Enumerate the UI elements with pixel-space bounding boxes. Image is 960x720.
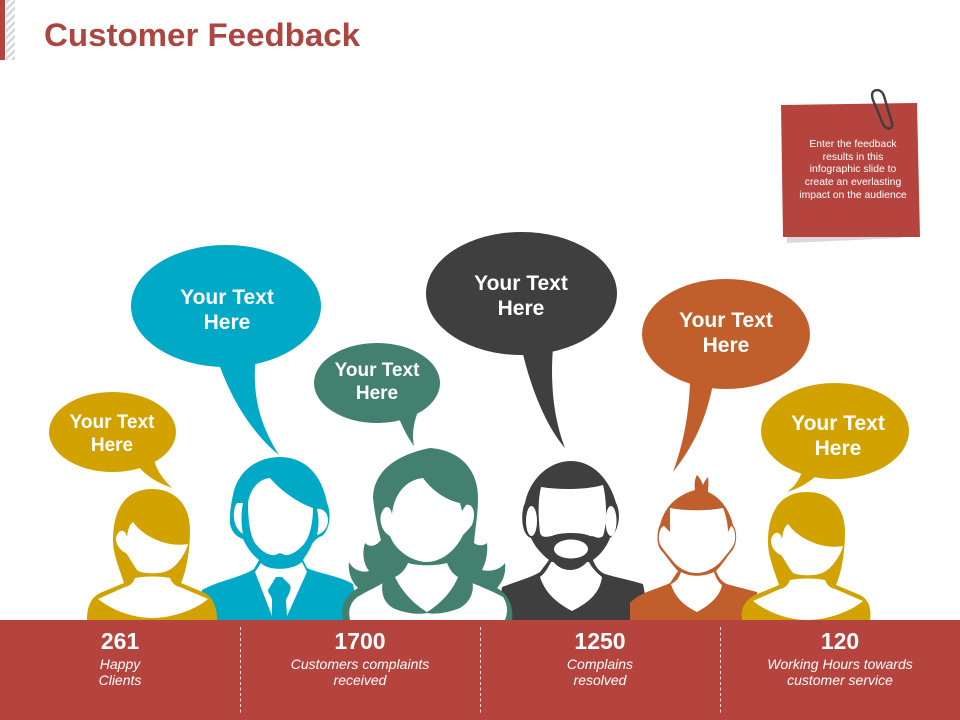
speech bubble: green: Your Text xyxy=(335,360,420,381)
speech bubble: yellow right: Your Text xyxy=(791,412,885,435)
note text: Enter the feedback xyxy=(809,139,897,150)
stat: happy clients: 261 xyxy=(101,628,139,654)
chest xyxy=(753,578,863,620)
note text: results in this xyxy=(823,152,883,163)
neck xyxy=(395,563,458,612)
collar xyxy=(382,565,473,614)
stat: working hours: 120 xyxy=(821,628,859,654)
note text: infographic slide to xyxy=(810,164,897,175)
stat: complaints received xyxy=(291,628,429,688)
speech bubble: green xyxy=(314,343,440,446)
face xyxy=(380,478,474,562)
speech bubble: dark: Here xyxy=(498,297,544,320)
stat: working hours: Working Hours towards xyxy=(767,656,913,672)
face xyxy=(771,524,843,575)
figure: blue man xyxy=(200,457,360,620)
neck xyxy=(540,562,602,611)
stat: working hours xyxy=(767,628,913,688)
note text xyxy=(799,139,907,201)
ears xyxy=(526,506,537,536)
stat: happy clients: Happy xyxy=(100,656,141,672)
stat: complaints resolved: 1250 xyxy=(574,628,626,654)
note text: create an everlasting xyxy=(805,177,901,188)
figure: orange man xyxy=(630,475,757,620)
speech bubble: yellow right xyxy=(761,383,909,492)
beard xyxy=(540,530,603,570)
figure: dark man xyxy=(498,461,650,620)
title: Customer Feedback xyxy=(44,17,360,53)
stat: complaints resolved: resolved xyxy=(574,672,628,688)
neck xyxy=(671,572,722,612)
stat: complaints received: 1700 xyxy=(334,628,386,654)
collar xyxy=(255,562,307,616)
mouth gap xyxy=(554,540,588,558)
speech bubble: yellow left: Your Text xyxy=(70,412,155,433)
face xyxy=(248,478,313,555)
stat: complaints received: received xyxy=(334,672,388,688)
speech bubble: dark xyxy=(426,232,617,448)
stat: happy clients: Clients xyxy=(99,672,141,688)
sticky note xyxy=(781,90,920,243)
face xyxy=(659,508,735,573)
speech bubble: blue: Here xyxy=(204,311,250,334)
speech bubble: yellow left: Here xyxy=(91,435,133,456)
face xyxy=(539,485,606,538)
face xyxy=(116,522,188,573)
speech bubble: blue: Your Text xyxy=(180,286,274,309)
speech bubble: orange: Your Text xyxy=(679,309,773,332)
stats band xyxy=(0,620,960,720)
title accent bar xyxy=(0,0,15,60)
speech bubble: orange xyxy=(642,279,810,472)
stat: happy clients xyxy=(99,628,141,688)
speech bubble: yellow right: Here xyxy=(815,437,861,460)
chest xyxy=(349,583,507,620)
speech bubble: green: Here xyxy=(356,383,398,404)
stat: complaints resolved xyxy=(567,628,633,688)
icon: paper clip xyxy=(872,90,892,129)
ears xyxy=(234,503,243,534)
speech bubble: blue xyxy=(131,245,321,455)
figure: yellow woman right xyxy=(742,492,871,620)
chest xyxy=(98,576,208,618)
stat: complaints received: Customers complaints xyxy=(291,656,429,672)
stat: working hours: customer service xyxy=(787,672,893,688)
speech bubble: yellow left xyxy=(49,392,176,488)
speech bubble: orange: Here xyxy=(703,334,749,357)
figure: green woman xyxy=(342,448,512,620)
note text: impact on the audience xyxy=(799,190,907,201)
speech bubble: dark: Your Text xyxy=(474,272,568,295)
stat: complaints resolved: Complains xyxy=(567,656,633,672)
figure: yellow woman left xyxy=(87,489,217,620)
